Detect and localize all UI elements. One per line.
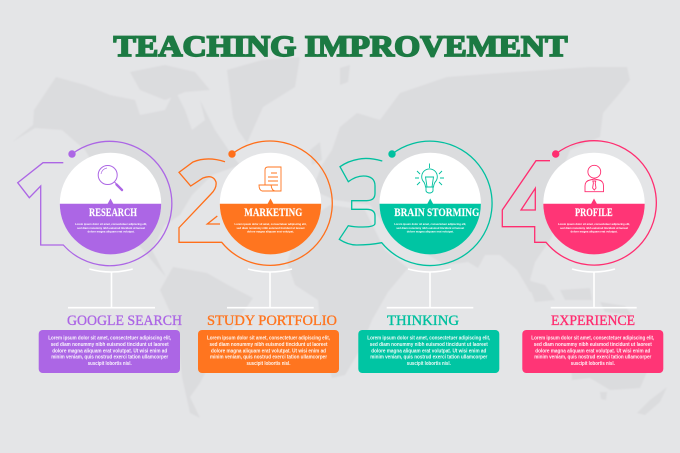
- connector: [387, 269, 473, 308]
- coloured half disc: [60, 198, 161, 254]
- icon: scroll: [259, 167, 281, 191]
- text box: sed diam nonummy nibh euismod tincidunt ut laoreet: [370, 342, 488, 348]
- disc caption: sed diam nonummy nibh euismod tincidunt ut laoreet: [236, 226, 305, 230]
- text box: [522, 330, 663, 373]
- disc caption: [394, 222, 466, 234]
- text box: dolore magna aliquam erat volutpat. Ut wisi enim ad: [211, 348, 326, 354]
- text box: minim veniam, quis nostrud exerci tation ullamcorper: [210, 355, 327, 361]
- text box: minim veniam, quis nostrud exerci tation ullamcorper: [370, 355, 487, 361]
- white disc: [380, 153, 481, 254]
- text box: sed diam nonummy nibh euismod tincidunt ut laoreet: [51, 342, 169, 348]
- text box: suscipit lobortis nisl.: [246, 361, 291, 367]
- white disc: [220, 153, 321, 254]
- heading: marketing: MARKETING: [244, 207, 302, 219]
- connector: [227, 269, 314, 308]
- connector: [68, 269, 155, 308]
- white disc: [543, 153, 645, 254]
- text box: suscipit lobortis nisl.: [88, 361, 132, 367]
- disc caption: sed diam nonummy nibh euismod tincidunt ut laoreet: [396, 226, 464, 230]
- disc caption: dolore magna aliquam erat volutpat.: [247, 230, 294, 234]
- text box: minim veniam, quis nostrud exerci tation ullamcorper: [51, 355, 168, 361]
- icon: magnifier: [98, 166, 122, 190]
- disc caption: Lorem ipsum dolor sit amet, consectetuer adipiscing elit,: [75, 222, 147, 226]
- text box: Lorem ipsum dolor sit amet, consectetuer adipiscing elit,: [48, 336, 172, 342]
- disc caption: sed diam nonummy nibh euismod tincidunt ut laoreet: [77, 226, 145, 230]
- numeral 1 with ring: [18, 141, 172, 266]
- disc caption: Lorem ipsum dolor sit amet, consectetuer adipiscing elit,: [558, 222, 630, 226]
- text box: suscipit lobortis nisl.: [571, 361, 615, 367]
- text box: Lorem ipsum dolor sit amet, consectetuer adipiscing elit,: [531, 336, 655, 342]
- panel: step 3 brain storming: [339, 141, 499, 373]
- text box: dolore magna aliquam erat volutpat. Ut wisi enim ad: [535, 348, 650, 354]
- coloured half disc: [543, 198, 645, 254]
- heading: profile: PROFILE: [575, 207, 613, 219]
- disc caption: [558, 222, 630, 234]
- numeral 3 with ring: [339, 141, 492, 266]
- disc caption: Lorem ipsum dolor sit amet, consectetuer adipiscing elit,: [234, 222, 307, 226]
- numeral 2 with ring: [179, 141, 332, 265]
- disc caption: sed diam nonummy nibh euismod tincidunt ut laoreet: [560, 226, 628, 230]
- text box: Lorem ipsum dolor sit amet, consectetuer adipiscing elit,: [367, 336, 491, 342]
- text box: [198, 330, 339, 373]
- text box: sed diam nonummy nibh euismod tincidunt ut laoreet: [210, 342, 328, 348]
- coloured half disc: [380, 198, 481, 254]
- disc caption: dolore magna aliquam erat volutpat.: [407, 230, 454, 234]
- world map background: [12, 57, 667, 418]
- panel: step 1 research: [18, 141, 182, 373]
- text box: minim veniam, quis nostrud exerci tation ullamcorper: [534, 355, 651, 361]
- panel: step 2 marketing: [179, 141, 339, 373]
- icon: person: [585, 165, 604, 192]
- numeral 4 with ring: [502, 141, 656, 265]
- subheading: experience: EXPERIENCE: [551, 313, 635, 329]
- disc caption: dolore magna aliquam erat volutpat.: [88, 230, 135, 234]
- disc caption: Lorem ipsum dolor sit amet, consectetuer adipiscing elit,: [394, 222, 466, 226]
- text box: Lorem ipsum dolor sit amet, consectetuer adipiscing elit,: [207, 336, 331, 342]
- text box: dolore magna aliquam erat volutpat. Ut wisi enim ad: [52, 348, 167, 354]
- subheading: study portfolio: STUDY PORTFOLIO: [207, 313, 337, 329]
- subheading: thinking: THINKING: [387, 313, 459, 329]
- text box: [39, 330, 180, 373]
- title: TEACHING IMPROVEMENT: [114, 30, 568, 63]
- text box: [358, 330, 499, 373]
- coloured half disc: [220, 198, 321, 254]
- text box: dolore magna aliquam erat volutpat. Ut wisi enim ad: [371, 348, 486, 354]
- icon: light bulb: [415, 164, 444, 193]
- text box: suscipit lobortis nisl.: [407, 361, 451, 367]
- heading: research: RESEARCH: [89, 207, 137, 219]
- panel: step 4 profile: [502, 141, 663, 373]
- disc caption: [234, 222, 307, 234]
- subheading: google search: GOOGLE SEARCH: [67, 313, 182, 329]
- text box: sed diam nonummy nibh euismod tincidunt ut laoreet: [534, 342, 652, 348]
- white disc: [60, 153, 161, 254]
- heading: brain storming: BRAIN STORMING: [394, 207, 479, 219]
- disc caption: [75, 222, 147, 234]
- connector: [551, 269, 637, 308]
- disc caption: dolore magna aliquam erat volutpat.: [570, 230, 618, 234]
